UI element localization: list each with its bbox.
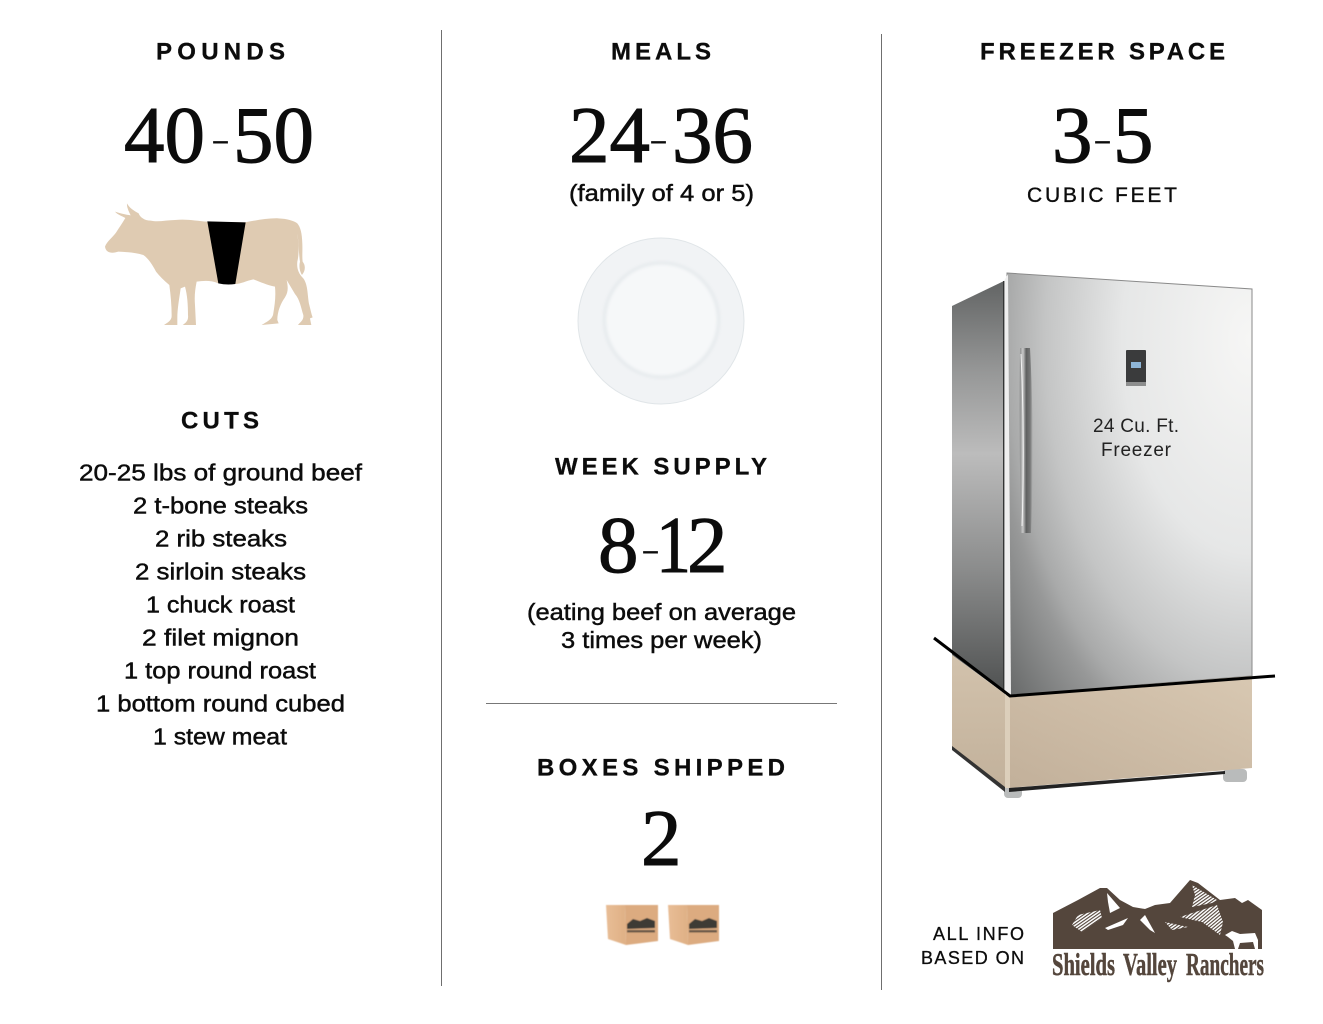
heading: freezer space: FREEZER SPACE [980, 38, 1225, 66]
note: eating frequency: (eating beef on average [527, 599, 796, 625]
number: 8-12: 2 [687, 500, 728, 590]
number: 24-36: 24 [569, 90, 650, 180]
freezer label [1093, 416, 1179, 461]
list of cuts [79, 460, 363, 750]
heading: pounds: POUNDS [156, 38, 285, 66]
number: 24-36 [569, 90, 753, 180]
number: 8-12 [598, 500, 728, 590]
control panel [1126, 350, 1146, 386]
panel: meals [486, 38, 837, 945]
number: 3-5: 5 [1113, 90, 1154, 180]
freezer door [1007, 273, 1252, 695]
panel: freezer space [921, 38, 1275, 982]
feet [1004, 786, 1022, 798]
icon: shipping boxes [606, 905, 719, 945]
list of cuts: 20-25 lbs of ground beef [79, 460, 363, 486]
icon: plate [578, 238, 744, 404]
freezer door base [1009, 676, 1252, 788]
source label: ALL INFO [933, 924, 1024, 944]
freezer side [952, 281, 1004, 693]
number: 40-50: 40 [124, 90, 205, 180]
list of cuts: 1 chuck roast [146, 592, 296, 618]
list of cuts: 2 sirloin steaks [135, 558, 306, 584]
freezer side base [952, 655, 1005, 789]
number: 8-12: 1 [656, 500, 691, 590]
logo wordmark [1052, 946, 1264, 982]
note: eating frequency [527, 599, 796, 653]
heading: cuts: CUTS [181, 408, 259, 434]
icon: freezer with fill level [934, 273, 1275, 798]
number: 8-12: 8 [598, 500, 638, 590]
logo wordmark: Ranchers [1186, 946, 1264, 982]
door edge [1004, 274, 1011, 695]
number: 3-5: 3 [1052, 90, 1092, 180]
icon: cow with highlighted cut [105, 203, 313, 325]
list of cuts: 1 top round roast [124, 658, 317, 684]
mountains [1053, 880, 1262, 949]
list of cuts: 2 t-bone steaks [133, 492, 308, 518]
number: 40-50: 50 [233, 90, 314, 180]
number: 24-36: - [649, 122, 668, 157]
list of cuts: 1 stew meat [153, 724, 288, 750]
list of cuts: 1 bottom round cubed [96, 690, 345, 716]
freezer label: 24 Cu. Ft. [1093, 416, 1179, 437]
note: family size: (family of 4 or 5) [569, 180, 754, 206]
list of cuts: 2 filet mignon [142, 624, 299, 650]
logo wordmark: Valley [1123, 946, 1177, 982]
divider left [441, 30, 442, 986]
heading: meals: MEALS [611, 38, 711, 66]
label: cubic feet: CUBIC FEET [1027, 184, 1177, 207]
divider right [881, 34, 882, 990]
number: 3-5 [1052, 90, 1154, 180]
source label [921, 924, 1024, 968]
door handle [1020, 348, 1033, 533]
note: eating frequency: 3 times per week) [561, 627, 762, 653]
fill level line [934, 638, 1275, 696]
source label: BASED ON [921, 948, 1024, 968]
number: 8-12: - [641, 532, 660, 567]
freezer label: Freezer [1101, 440, 1172, 461]
number: 40-50 [124, 90, 314, 180]
heading: boxes shipped: BOXES SHIPPED [537, 754, 785, 782]
number: 24-36: 36 [672, 90, 753, 180]
logo: Shields Valley Ranchers [1052, 880, 1264, 982]
number: 3-5: - [1093, 122, 1112, 157]
list of cuts: 2 rib steaks [155, 526, 287, 552]
logo wordmark: Shields [1052, 946, 1115, 982]
panel: pounds [79, 38, 363, 750]
number: 40-50: - [211, 122, 230, 157]
number: 2: 2 [641, 793, 682, 883]
heading: week supply: WEEK SUPPLY [555, 454, 767, 480]
